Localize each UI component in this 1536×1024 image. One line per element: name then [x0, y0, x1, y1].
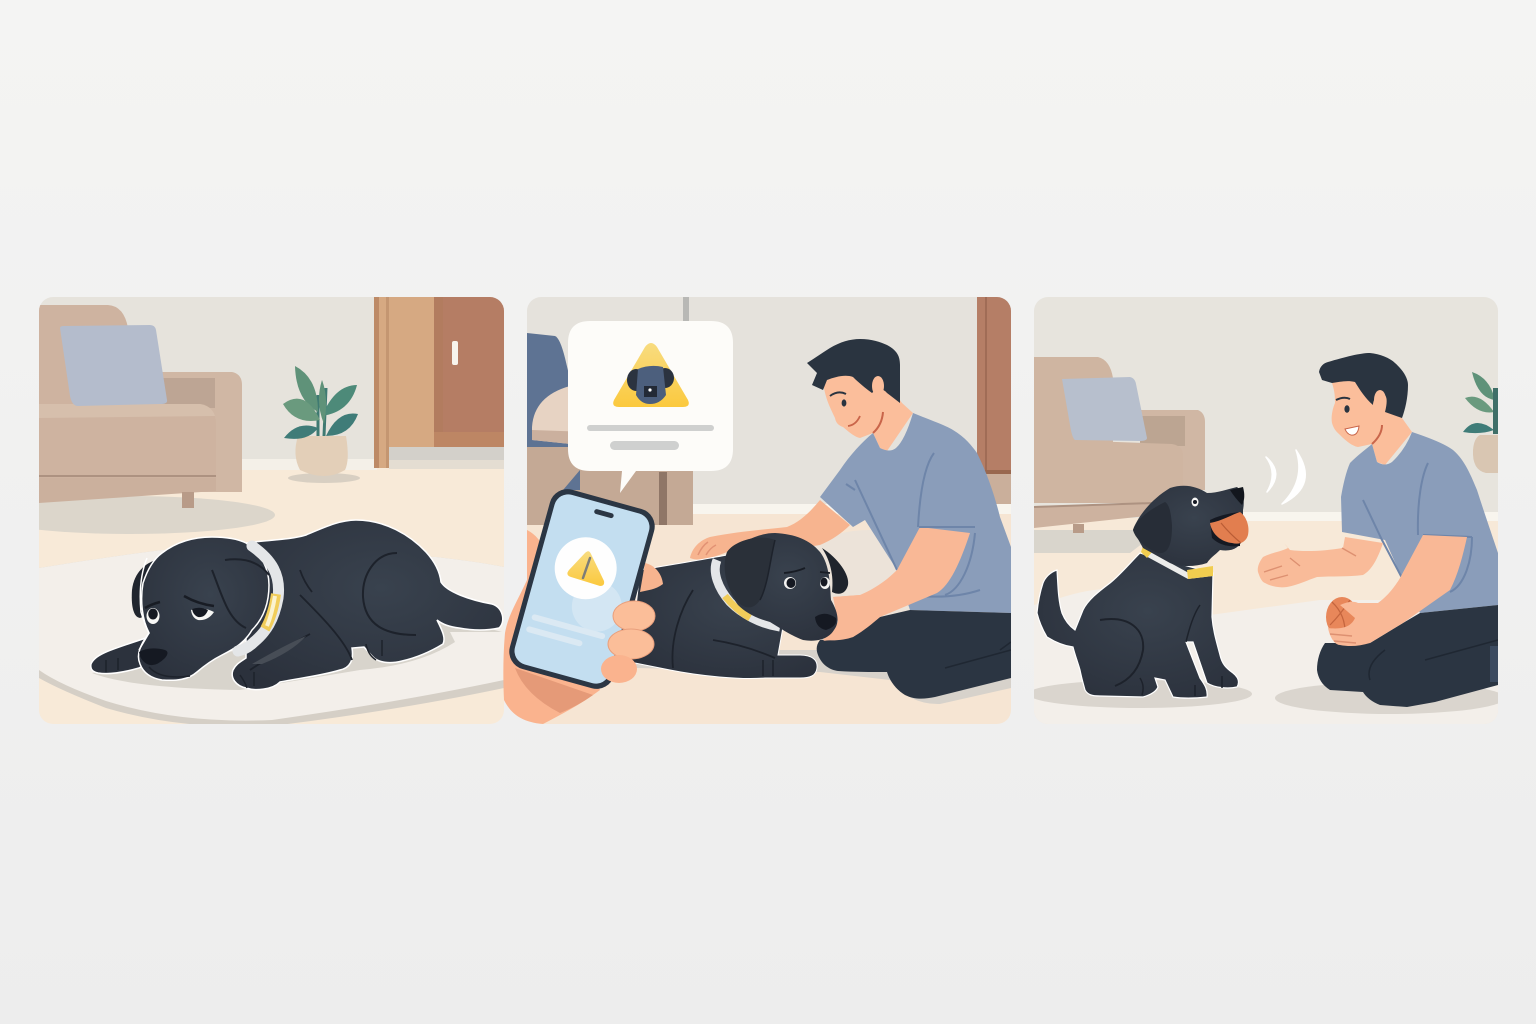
man shadow — [1275, 682, 1505, 714]
collar — [238, 546, 279, 651]
hand holding phone — [503, 485, 663, 724]
fingers — [613, 601, 655, 631]
comforted dog — [630, 533, 848, 679]
wall — [527, 297, 1011, 507]
speech bubble alert — [568, 321, 733, 493]
far ear — [132, 560, 154, 618]
head — [138, 537, 269, 680]
head — [1133, 486, 1244, 566]
ball — [1326, 597, 1358, 637]
collar — [1142, 548, 1213, 579]
front paw — [91, 637, 150, 674]
mouth — [1210, 512, 1240, 546]
body lines — [363, 553, 416, 635]
far arm — [690, 500, 850, 560]
cabinet — [374, 297, 504, 469]
happy man — [1258, 353, 1498, 707]
collar — [715, 560, 780, 627]
floor — [1034, 518, 1498, 724]
eyes and brows — [191, 608, 214, 620]
thumb behind — [640, 563, 663, 592]
floor shadow — [636, 650, 1011, 704]
cushion — [60, 325, 167, 406]
panel: happy dog and owner with ball — [1028, 297, 1505, 724]
three-panel illustration — [39, 297, 1498, 724]
phone — [505, 485, 659, 693]
floor — [39, 468, 504, 724]
tail and body — [232, 520, 503, 690]
ear — [1374, 390, 1386, 410]
head — [726, 533, 838, 641]
baseboard — [242, 459, 377, 470]
ear — [725, 538, 775, 607]
panel: dog lying sad — [0, 297, 504, 727]
ear — [1133, 502, 1172, 553]
neck and face — [823, 370, 913, 451]
happy dog — [1037, 486, 1249, 698]
ball in mouth — [1210, 512, 1249, 544]
nose — [139, 648, 168, 665]
dog icon — [627, 366, 674, 404]
floor — [527, 510, 1011, 724]
body — [630, 555, 817, 679]
eye and nose — [1192, 498, 1198, 506]
text line 1 — [587, 425, 714, 431]
rug area — [1034, 589, 1498, 724]
dog shadow — [92, 622, 502, 690]
text line 2 — [610, 441, 679, 450]
sad dog — [91, 520, 503, 690]
rug — [39, 550, 504, 727]
palm shadow — [515, 668, 593, 713]
panel: phone alert and owner comforting dog — [527, 297, 1011, 724]
baseboard — [693, 504, 1011, 514]
plant — [1463, 372, 1498, 473]
near arm — [823, 527, 970, 640]
sound arcs — [1266, 450, 1305, 504]
hair — [807, 339, 900, 403]
dog shadow — [1028, 680, 1252, 708]
nose — [815, 614, 836, 630]
right ear — [822, 548, 848, 594]
left arm and hand — [1258, 537, 1383, 587]
pants — [817, 610, 1011, 699]
wall — [1034, 297, 1498, 519]
hand on dog — [823, 595, 870, 641]
hair — [1319, 353, 1408, 418]
right arm and hand — [1328, 535, 1467, 646]
face details — [1336, 398, 1350, 400]
sofa — [1034, 357, 1205, 553]
eyes — [784, 577, 796, 589]
ear — [872, 376, 884, 392]
pole — [683, 297, 689, 323]
chair and sofa — [527, 333, 693, 525]
face details — [830, 392, 846, 396]
door — [977, 297, 1011, 504]
sofa — [39, 305, 275, 534]
baseboard — [1240, 512, 1498, 521]
palm — [503, 530, 600, 724]
bubble — [568, 321, 733, 493]
potted plant — [283, 366, 360, 483]
screen contents — [526, 527, 638, 655]
screen warning icon — [567, 551, 604, 586]
shirt — [820, 413, 1011, 613]
body and tail — [1037, 553, 1238, 698]
man comforting dog — [690, 339, 1011, 699]
wall — [40, 297, 374, 459]
shirt — [1341, 432, 1498, 613]
neck and face — [1332, 375, 1412, 465]
warning triangle — [613, 343, 689, 407]
pants — [1317, 605, 1498, 707]
cushion — [1062, 377, 1147, 441]
ear fold — [212, 559, 269, 628]
floor glow — [814, 530, 910, 640]
